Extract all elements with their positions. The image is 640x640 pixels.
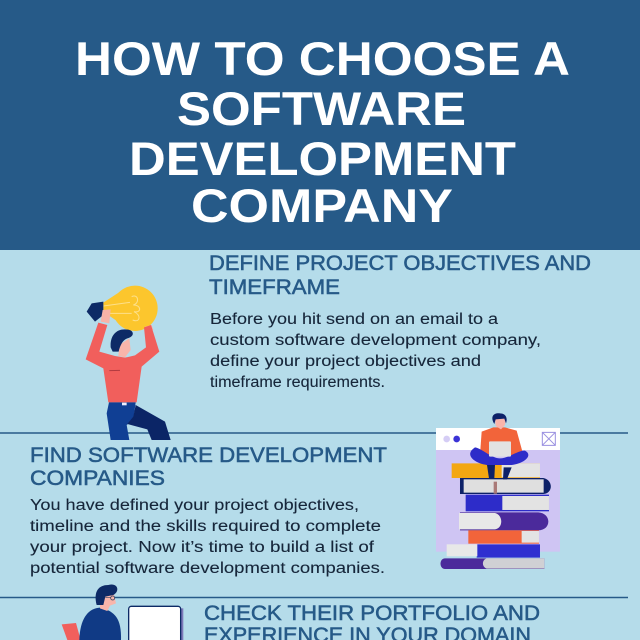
section 1 body text: custom software development company,	[210, 332, 541, 349]
section 3 heading	[204, 601, 540, 640]
title banner: DEVELOPMENT	[129, 132, 516, 185]
section 2 body text: You have defined your project objectives,	[30, 497, 359, 514]
title banner: SOFTWARE	[177, 82, 466, 135]
icon: person lifting light bulb	[86, 286, 171, 440]
icon: person at computer monitor	[62, 585, 183, 640]
section 1 heading	[209, 251, 591, 299]
section 2 heading: COMPANIES	[30, 466, 165, 490]
title banner	[0, 0, 640, 250]
section 1 heading: DEFINE PROJECT OBJECTIVES AND	[209, 251, 591, 275]
title banner: HOW TO CHOOSE A	[75, 32, 570, 85]
section 2 body text: timeline and the skills required to complete	[30, 518, 381, 535]
section 1 body text	[210, 311, 541, 391]
section 2 body text: potential software development companies.	[30, 560, 385, 577]
section 1 body text: define your project objectives and	[210, 353, 481, 370]
title banner: COMPANY	[191, 179, 453, 232]
section 1 body text: Before you hit send on an email to a	[210, 311, 498, 328]
section 1 heading: TIMEFRAME	[209, 275, 340, 299]
section 1 body text: timeframe requirements.	[210, 374, 385, 391]
section 2 heading	[30, 443, 387, 490]
section 2 body text	[30, 497, 385, 577]
section 3 heading: CHECK THEIR PORTFOLIO AND	[204, 601, 540, 625]
section 2 body text: your project. Now it’s time to build a list of	[30, 539, 375, 556]
section 2 heading: FIND SOFTWARE DEVELOPMENT	[30, 443, 387, 467]
icon: person with laptop on stacked books	[436, 413, 560, 569]
